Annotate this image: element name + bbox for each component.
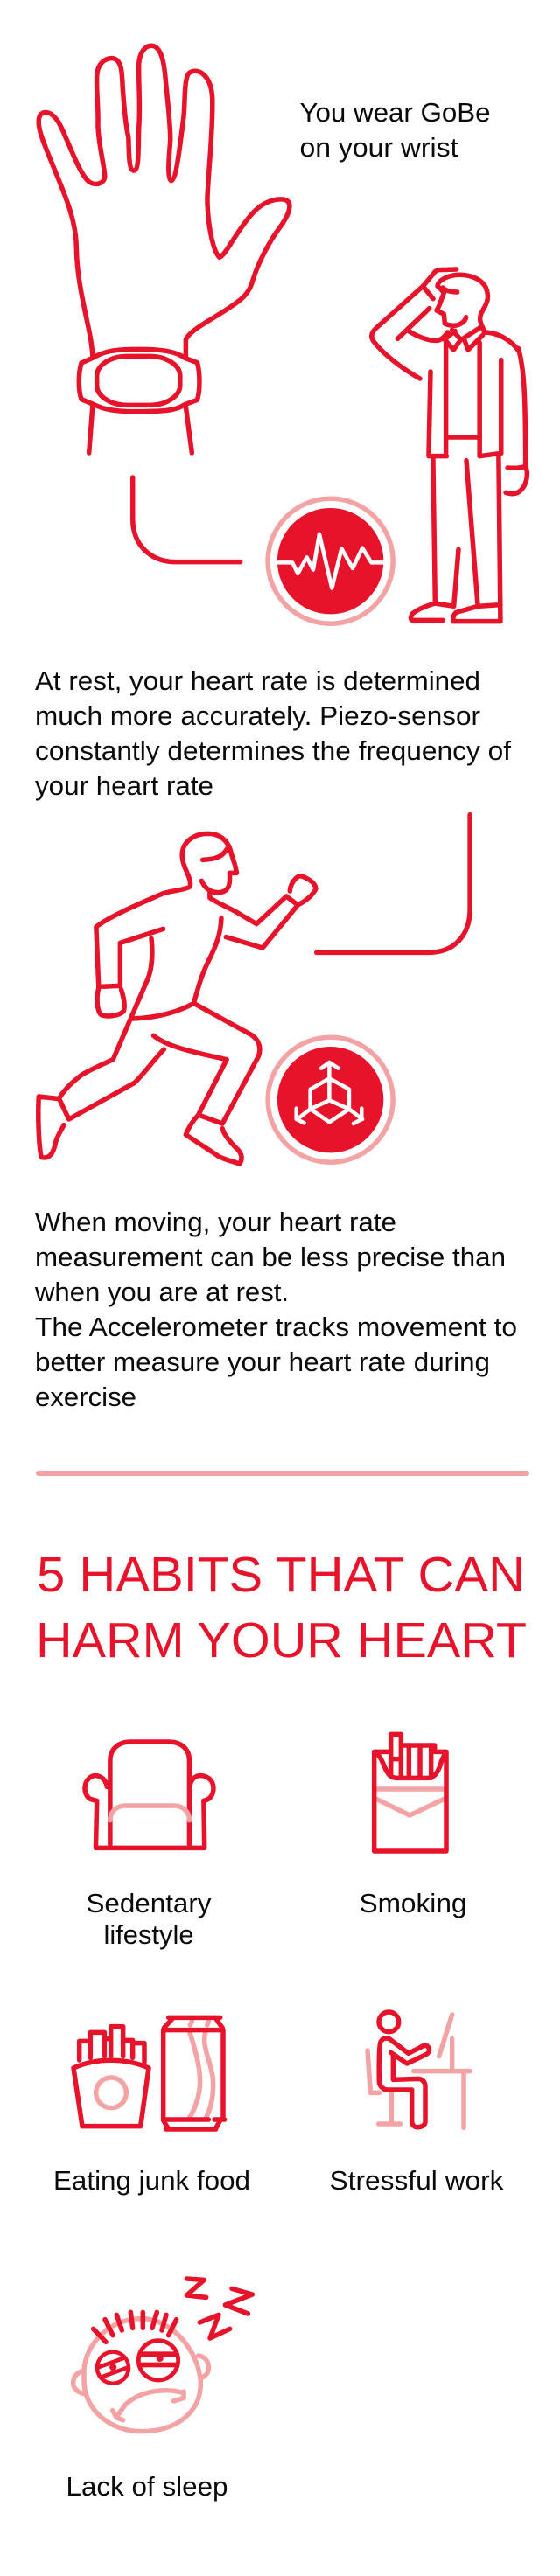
- connector line to heart rate icon: [133, 477, 241, 562]
- label: lack of sleep: Lack of sleep: [66, 2471, 228, 2502]
- text: you wear GoBe: on your wrist: [299, 132, 458, 163]
- head and raised arm: [372, 269, 518, 379]
- icon: fries and soda can: [74, 2017, 225, 2129]
- wristband body: [79, 349, 200, 412]
- hand outline: [38, 45, 290, 357]
- wrist lines: [89, 407, 192, 453]
- heading: 5 habits: [36, 1547, 527, 1668]
- label: sedentary lifestyle: Sedentary: [86, 1888, 212, 1918]
- figure: running man: [38, 833, 316, 1164]
- right eye: [138, 2341, 178, 2380]
- icon: cigarette pack: [374, 1734, 446, 1851]
- label: sedentary lifestyle: lifestyle: [103, 1919, 194, 1950]
- suit and legs: [410, 343, 527, 622]
- label: eating junk food: Eating junk food: [53, 2165, 250, 2196]
- icon: armchair: [85, 1742, 214, 1848]
- illustration: hand wearing GoBe: [38, 45, 290, 453]
- figure: man standing at rest: [372, 269, 527, 622]
- text: when moving paragraph: [34, 1207, 517, 1412]
- text: at rest paragraph: your heart rate: [35, 770, 214, 801]
- icon: tired face: [74, 2279, 252, 2432]
- heading: 5 habits: 5 HABITS THAT CAN: [37, 1547, 525, 1603]
- icon: person at desk: [368, 2012, 470, 2127]
- text: at rest paragraph: [35, 665, 511, 801]
- text: when moving paragraph: exercise: [35, 1382, 136, 1412]
- text: when moving paragraph: better measure your heart rate during: [35, 1347, 490, 1377]
- text: you wear GoBe: You wear GoBe: [299, 97, 490, 128]
- text: when moving paragraph: When moving, your heart rate: [35, 1207, 396, 1237]
- label: sedentary lifestyle: [86, 1888, 212, 1950]
- text: when moving paragraph: The Accelerometer tracks movement to: [35, 1312, 517, 1342]
- icon: accelerometer: [268, 1037, 393, 1162]
- left eye: [93, 2348, 133, 2388]
- label: smoking: Smoking: [359, 1888, 467, 1918]
- text: you wear GoBe: [299, 97, 490, 163]
- text: when moving paragraph: when you are at rest.: [34, 1277, 289, 1307]
- label: stressful work: Stressful work: [329, 2165, 504, 2196]
- text: when moving paragraph: measurement can be less precise than: [35, 1242, 506, 1272]
- text: at rest paragraph: constantly determines the frequency of: [35, 735, 511, 766]
- device face: [97, 356, 180, 405]
- icon: heart rate sensor: [268, 498, 393, 623]
- text: at rest paragraph: much more accurately. Piezo-sensor: [35, 700, 480, 731]
- text: at rest paragraph: At rest, your heart rate is determined: [35, 665, 480, 696]
- heading: 5 habits: HARM YOUR HEART: [36, 1612, 527, 1668]
- connector line to accelerometer icon: [317, 815, 470, 952]
